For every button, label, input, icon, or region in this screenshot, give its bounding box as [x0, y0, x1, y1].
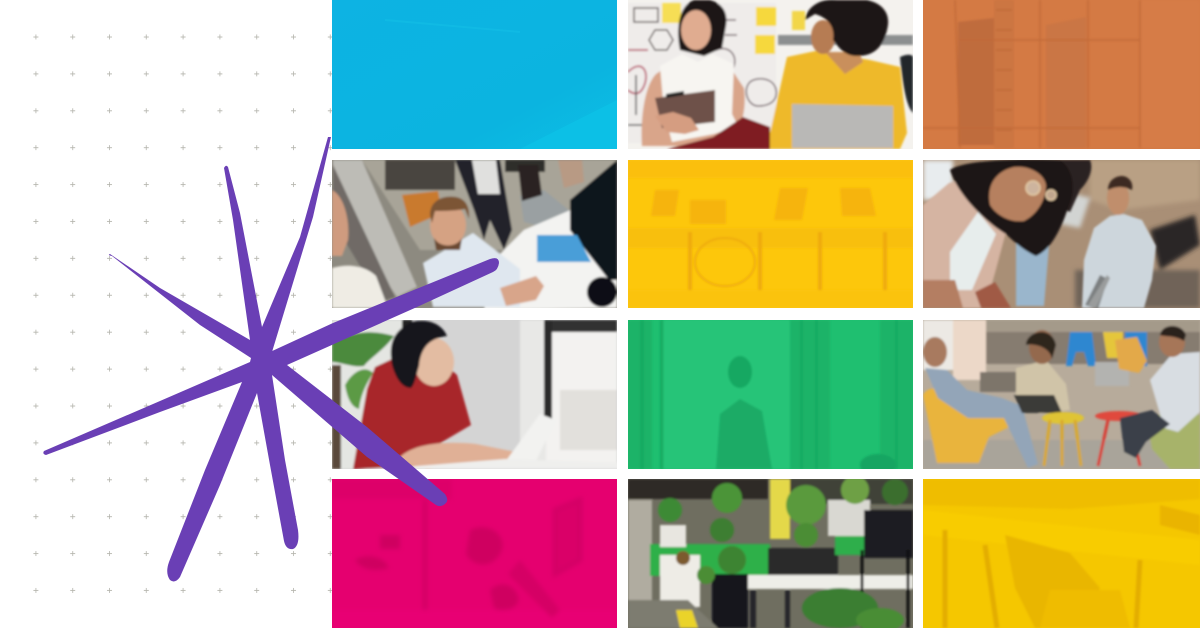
- tile: green tinted curtain silhouette photo: [628, 320, 913, 476]
- tile: orange tinted building photo: [923, 0, 1200, 149]
- tile: yellow tinted desk and chair photo: [923, 479, 1200, 628]
- tile: cyan tinted photo: [332, 0, 617, 149]
- tile: woman with glasses and colleague: [923, 159, 1200, 309]
- background plus-sign dot grid: [18, 18, 332, 608]
- tile: woman in red top working on laptop: [332, 320, 625, 470]
- tile: photo of smiling man in open office: [332, 160, 617, 310]
- tile: amber tinted desks photo: [628, 160, 913, 308]
- tile: green office with plants photo: [628, 476, 913, 628]
- icon: purple hand-drawn asterisk: [43, 137, 499, 581]
- tile: lounge meeting photo: [923, 320, 1200, 469]
- tile: photo of two women with tablet and laptop: [628, 0, 913, 149]
- tile: magenta tinted office photo: [332, 479, 617, 628]
